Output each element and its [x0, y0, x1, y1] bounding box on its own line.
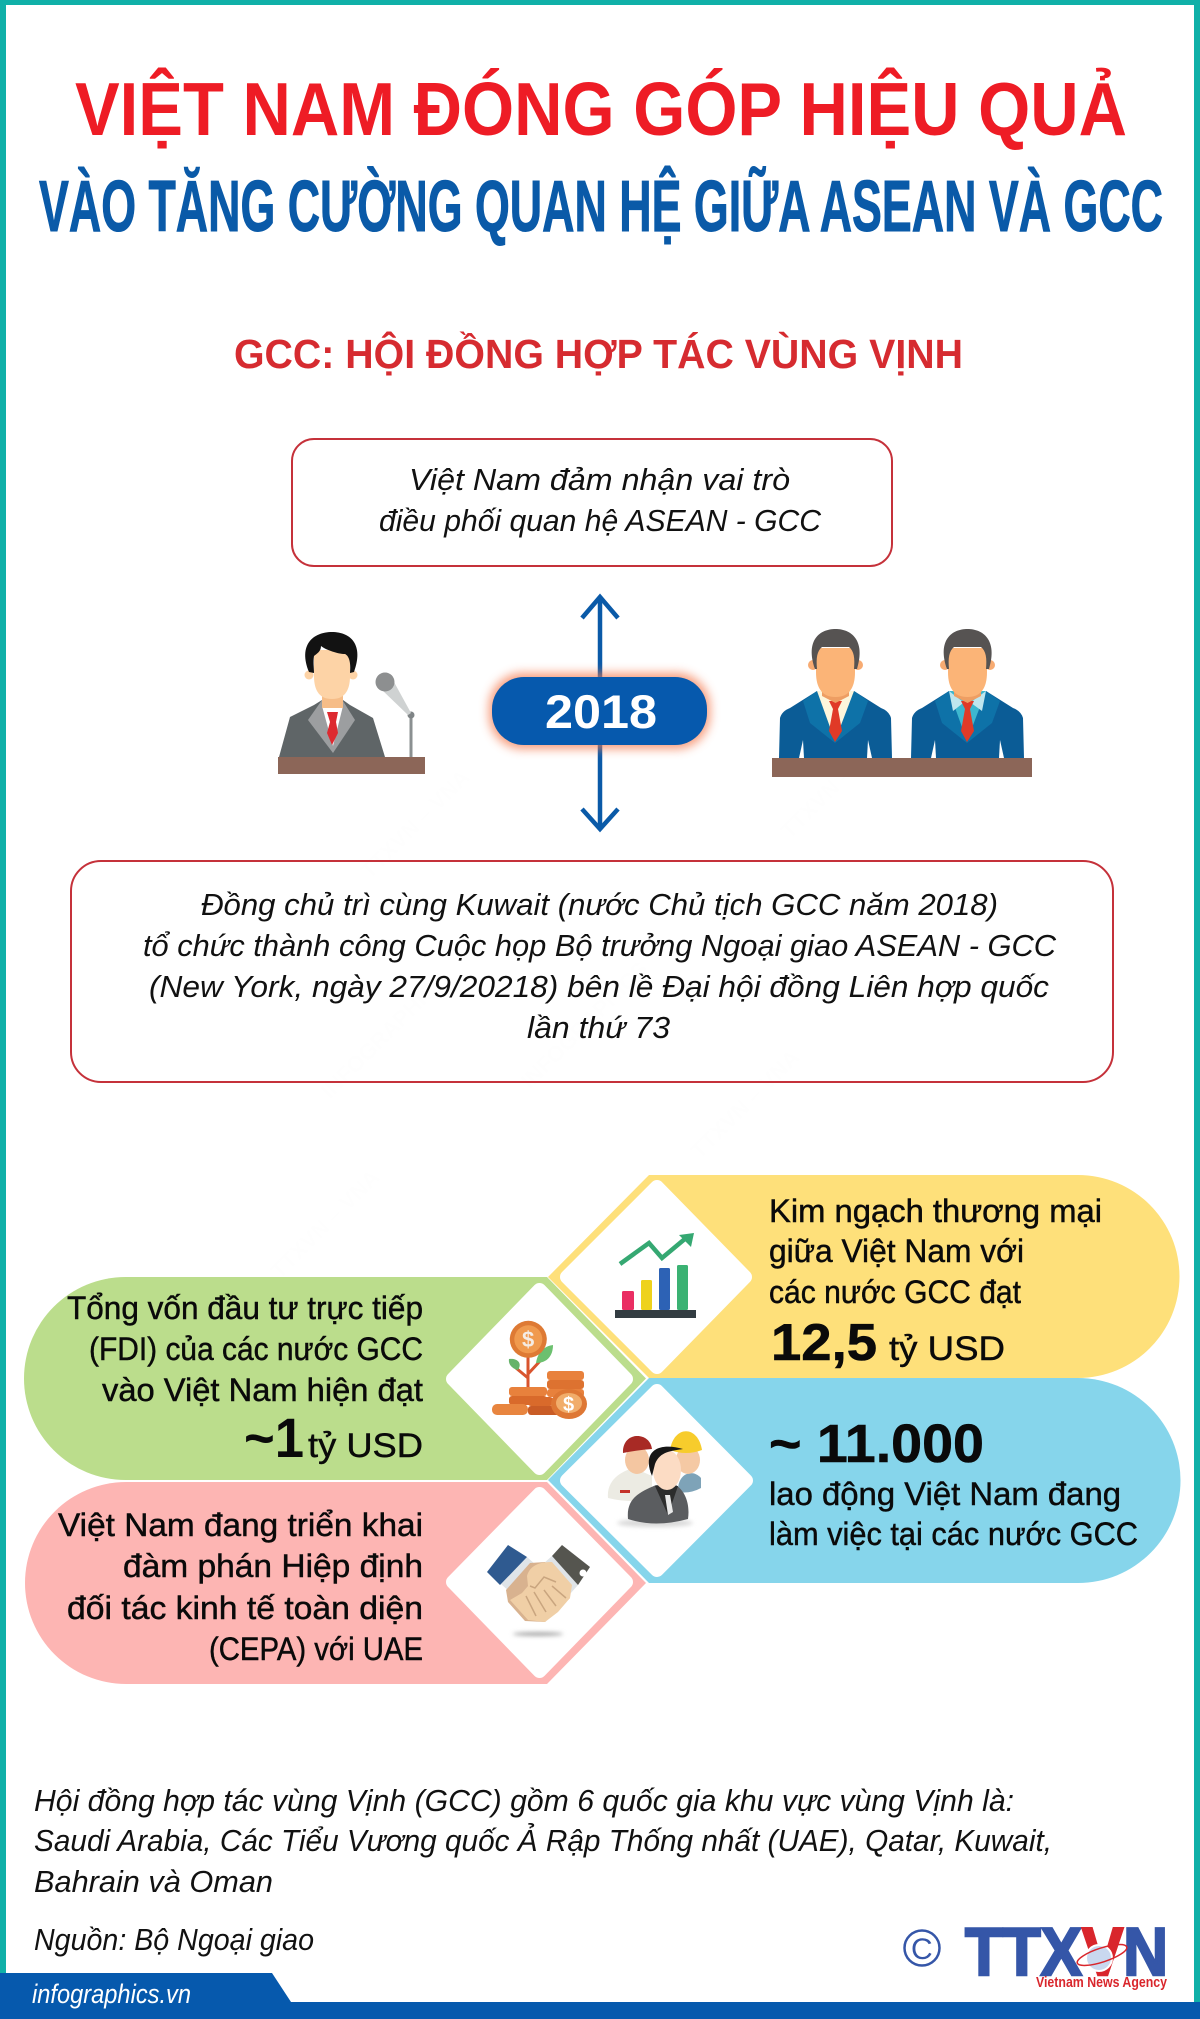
delegate right	[911, 629, 1024, 758]
footer bar	[0, 1973, 1200, 2019]
podium	[278, 757, 425, 774]
text: trade value: 12,5	[771, 1314, 877, 1372]
title	[39, 67, 1163, 247]
text block: GCC members	[34, 1783, 1052, 1899]
callout: Kuwait co-chair	[71, 861, 1113, 1082]
text: TTXVN – VNA	[776, 725, 895, 844]
text: trade value: tỷ USD	[889, 1330, 1005, 1368]
text block: GCC members: Bahrain và Oman	[34, 1864, 273, 1899]
year badge: 2018: 2018	[545, 685, 657, 738]
icon: two delegates at table	[772, 629, 1032, 777]
text: trade value: giữa Việt Nam với	[769, 1233, 1024, 1269]
text: workers: lao động Việt Nam đang	[769, 1476, 1121, 1512]
text: workers: ~ 11.000	[769, 1414, 984, 1474]
text: TTXVN – VNA	[266, 1165, 385, 1284]
text: trade value: Kim ngạch thương mại	[769, 1193, 1102, 1229]
callout: coordinator role	[292, 439, 892, 566]
logo: TTXVN: Vietnam News Agency	[1036, 1975, 1167, 1991]
delegate left	[779, 629, 892, 758]
callout: coordinator role: điều phối quan hệ ASEAN - GCC	[379, 503, 822, 538]
footer bar: infographics.vn	[32, 1979, 191, 2009]
text: CEPA: Việt Nam đang triển khai	[58, 1507, 423, 1543]
callout: Kuwait co-chair: tổ chức thành công Cuộc họp Bộ trưởng Ngoại giao ASEAN - GCC	[143, 928, 1057, 963]
callout: Kuwait co-chair: (New York, ngày 27/9/20218) bên lề Đại hội đồng Liên hợp quốc	[149, 969, 1050, 1004]
text: FDI: ~1	[244, 1406, 304, 1469]
panel: FDI	[24, 1277, 646, 1480]
text: INFOGRAPHICS	[316, 967, 453, 1104]
text: FDI: (FDI) của các nước GCC	[89, 1331, 423, 1367]
icon: growth chart	[615, 1233, 696, 1318]
icon: coins and plant	[492, 1321, 587, 1419]
icon: coins and plant: $	[563, 1394, 574, 1416]
callout: coordinator role: Việt Nam đảm nhận vai trò	[409, 462, 790, 497]
callout: Kuwait co-chair: Đồng chủ trì cùng Kuwait (nước Chủ tịch GCC năm 2018)	[201, 887, 998, 922]
text: FDI: vào Việt Nam hiện đạt	[102, 1372, 423, 1408]
text: FDI: Tổng vốn đầu tư trực tiếp	[67, 1290, 423, 1326]
icon: speaker at podium	[278, 632, 425, 774]
text: workers	[769, 1414, 1138, 1552]
table	[772, 758, 1032, 777]
panel: trade value	[548, 1175, 1180, 1378]
callout: Kuwait co-chair: lần thứ 73	[527, 1010, 670, 1045]
panel: workers	[548, 1378, 1180, 1583]
text: CEPA: đối tác kinh tế toàn diện	[67, 1590, 423, 1626]
text block: GCC members: Saudi Arabia, Các Tiểu Vương quốc Ả Rập Thống nhất (UAE), Qatar, Kuwait,	[34, 1822, 1052, 1858]
microphone	[410, 715, 412, 757]
text: workers: làm việc tại các nước GCC	[769, 1516, 1138, 1552]
speaker body	[279, 700, 385, 757]
text: FDI	[67, 1290, 423, 1469]
text block: GCC members: Hội đồng hợp tác vùng Vịnh (GCC) gồm 6 quốc gia khu vực vùng Vịnh là:	[34, 1783, 1014, 1818]
text: CEPA: (CEPA) với UAE	[209, 1631, 423, 1667]
heading: GCC definition: GCC: HỘI ĐỒNG HỢP TÁC VÙNG VỊNH	[234, 331, 963, 377]
icon: coins and plant: $	[522, 1327, 534, 1352]
year badge: 2018	[489, 673, 710, 749]
icon: workers group	[608, 1431, 702, 1527]
icon: handshake	[487, 1545, 590, 1636]
panel: CEPA	[25, 1482, 646, 1684]
text: CEPA	[58, 1507, 423, 1667]
text: FDI: tỷ USD	[308, 1427, 423, 1465]
text: TTXVN – VNA	[356, 765, 475, 884]
text: CEPA: đàm phán Hiệp định	[123, 1548, 423, 1584]
speaker head	[304, 670, 314, 680]
source: Nguồn: Bộ Ngoại giao	[34, 1922, 314, 1957]
text: INFOGRAPHICS	[516, 957, 653, 1094]
logo: TTXVN: TTXVN	[965, 1914, 1168, 1990]
arrow: vertical double-headed	[582, 597, 618, 829]
logo: TTXVN: C	[911, 1933, 933, 1966]
text: TTXVN – VNA	[686, 1045, 805, 1164]
text: trade value: các nước GCC đạt	[769, 1274, 1021, 1310]
text: trade value	[769, 1193, 1102, 1372]
